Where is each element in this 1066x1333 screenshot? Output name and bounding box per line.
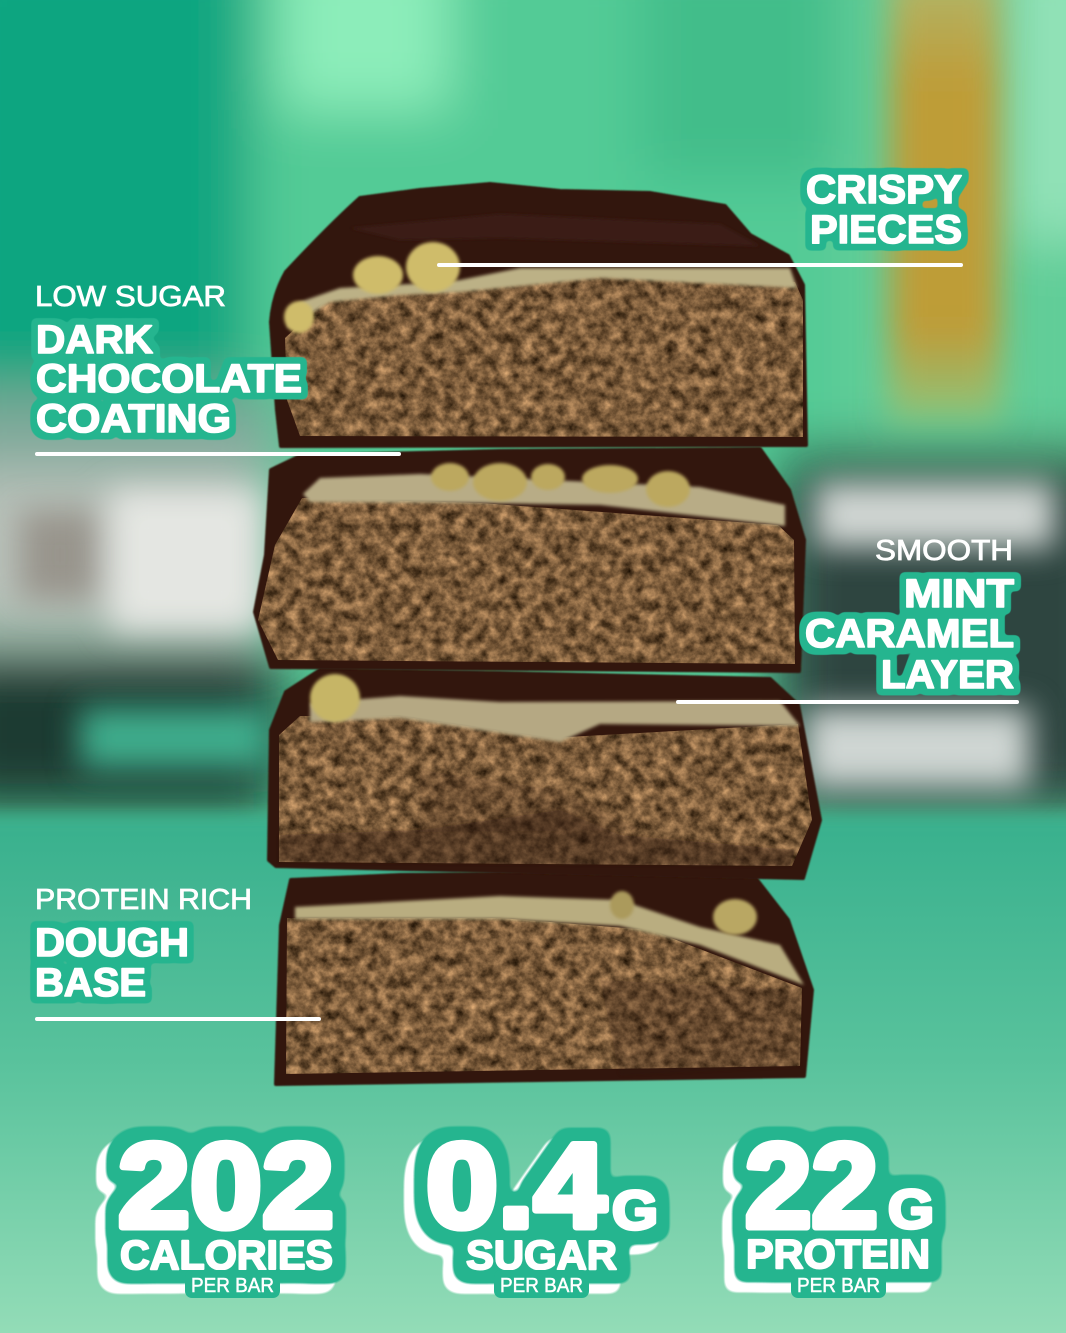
label: crispy pieces: PIECES <box>810 208 962 252</box>
stat: 0.4g sugar per bar: SUGAR <box>466 1232 617 1278</box>
bar 1 (top) <box>271 184 806 446</box>
bar 4 (bottom) <box>276 868 812 1084</box>
stat: 0.4g sugar per bar: PER BAR <box>500 1275 583 1297</box>
label: dark chocolate coating: CHOCOLATE <box>36 357 302 401</box>
stat: 0.4g sugar per bar <box>426 1119 658 1298</box>
bar 3 <box>269 670 820 878</box>
stat: 22g protein per bar <box>745 1119 934 1298</box>
leader line: dark chocolate coating <box>35 452 401 456</box>
bar 2 <box>255 449 804 671</box>
label: mint caramel layer <box>805 572 1014 697</box>
label: dough base <box>35 921 189 1005</box>
stat: 202 calories per bar: 202 <box>118 1119 334 1253</box>
label: dark chocolate coating: COATING <box>36 397 231 441</box>
label: low sugar: LOW SUGAR <box>35 281 226 313</box>
stacked protein bars <box>255 184 820 1084</box>
leader line: crispy pieces <box>437 263 963 267</box>
stat: 202 calories per bar <box>118 1119 334 1298</box>
label: crispy pieces <box>806 168 962 252</box>
stat: 202 calories per bar: PER BAR <box>191 1275 274 1297</box>
label: dark chocolate coating <box>36 318 302 441</box>
label: mint caramel layer: MINT <box>904 572 1014 616</box>
stat: 0.4g sugar per bar: 0.4 <box>426 1119 606 1253</box>
stat: 22g protein per bar: PER BAR <box>797 1275 880 1297</box>
label: mint caramel layer: CARAMEL <box>805 612 1014 656</box>
label: dark chocolate coating: DARK <box>36 318 153 362</box>
label: dough base: DOUGH <box>35 921 189 965</box>
label: mint caramel layer: LAYER <box>881 653 1014 697</box>
label: dough base: BASE <box>35 961 146 1005</box>
stat: 22g protein per bar: PROTEIN <box>746 1231 930 1277</box>
label: smooth: SMOOTH <box>875 535 1013 567</box>
label: crispy pieces: CRISPY <box>806 168 962 212</box>
stat: 22g protein per bar: G <box>888 1178 934 1240</box>
stat: 0.4g sugar per bar: G <box>612 1179 658 1241</box>
stat: 22g protein per bar: 22 <box>745 1119 878 1253</box>
leader line: mint caramel layer <box>676 700 1019 704</box>
leader line: dough base <box>35 1017 321 1021</box>
stat: 202 calories per bar: CALORIES <box>120 1232 333 1278</box>
label: protein rich: PROTEIN RICH <box>35 884 252 916</box>
